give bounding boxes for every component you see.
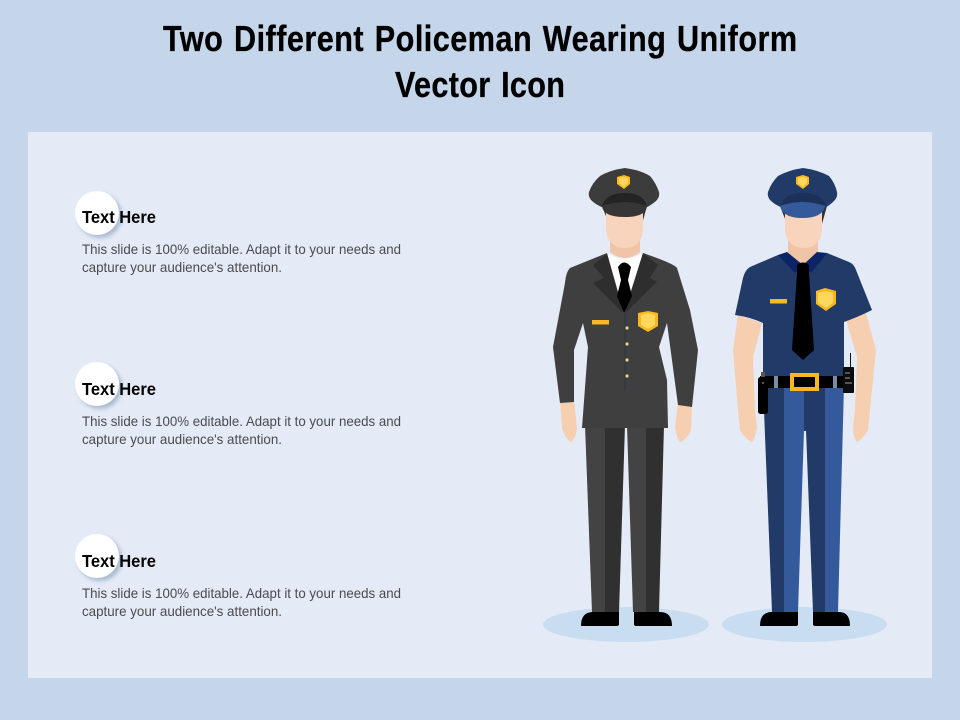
icon: circle 3	[75, 534, 122, 581]
body text 1: This slide is 100% editable. Adapt it to your needs and	[82, 241, 401, 257]
text block 1	[75, 191, 401, 275]
body text 2: This slide is 100% editable. Adapt it to your needs and	[82, 413, 401, 429]
name bar	[592, 320, 609, 324]
neck and face	[602, 205, 647, 258]
belt	[760, 373, 844, 391]
title	[163, 20, 797, 106]
panel: content background	[28, 132, 932, 678]
title: Vector Icon	[395, 66, 565, 106]
icon: circle 1	[75, 191, 122, 238]
body text 1	[82, 241, 401, 275]
police cap	[768, 168, 837, 218]
body text 3: capture your audience's attention.	[82, 603, 282, 619]
shoes	[760, 612, 850, 626]
tie	[617, 262, 632, 313]
heading 2: Text Here	[82, 378, 156, 399]
heading 1: Text Here	[82, 206, 156, 227]
icon: circle 2	[75, 362, 122, 409]
policeman in blue shirt	[722, 168, 887, 642]
trousers	[763, 385, 844, 612]
shirt	[735, 253, 872, 377]
heading 3: Text Here	[82, 550, 156, 571]
ground shadow	[543, 607, 709, 642]
tie	[792, 262, 814, 360]
hands	[560, 400, 692, 442]
body text 3	[82, 585, 401, 619]
body text 2: capture your audience's attention.	[82, 431, 282, 447]
name bar	[770, 299, 787, 304]
neck and face	[780, 205, 827, 268]
policeman in dark suit	[543, 168, 709, 642]
chest badge	[638, 311, 658, 332]
arms and hands	[733, 310, 876, 442]
chest badge	[816, 288, 836, 311]
white shirt	[604, 253, 645, 320]
text block 3	[75, 534, 401, 619]
holster	[758, 372, 768, 414]
trousers	[585, 425, 664, 612]
body text 1: capture your audience's attention.	[82, 259, 282, 275]
text block 2	[75, 362, 401, 447]
body text 3: This slide is 100% editable. Adapt it to your needs and	[82, 585, 401, 601]
ground shadow	[722, 607, 887, 642]
title: Two Different Policeman Wearing Uniform	[163, 20, 797, 60]
body text 2	[82, 413, 401, 447]
collar	[778, 252, 827, 273]
shoes	[581, 612, 672, 626]
radio	[843, 353, 854, 393]
jacket	[553, 253, 698, 428]
jacket buttons	[625, 326, 629, 378]
police cap	[589, 168, 659, 217]
